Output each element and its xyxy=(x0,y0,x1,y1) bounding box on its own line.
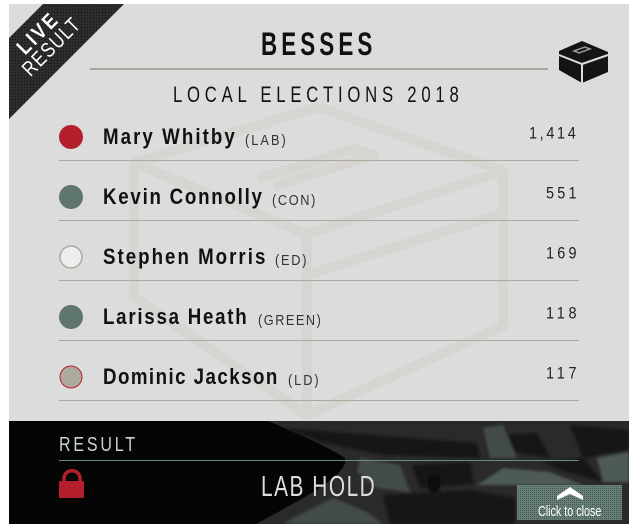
candidate name: Kevin Connolly xyxy=(103,186,263,209)
panel: result footer xyxy=(9,421,629,524)
result label: RESULT xyxy=(59,433,135,455)
result value: LAB HOLD xyxy=(261,471,375,503)
row: Mary Whitby xyxy=(59,124,576,149)
panel: main background xyxy=(9,4,629,421)
candidate name: Dominic Jackson xyxy=(103,366,277,389)
corner banner: live result: LIVE xyxy=(12,9,63,60)
votes: 169 xyxy=(546,244,577,263)
candidate name: Stephen Morris xyxy=(103,246,265,269)
icon: chevron up xyxy=(557,487,583,500)
icon: ballot box xyxy=(559,41,608,83)
result rule xyxy=(59,460,579,461)
party label: (CON) xyxy=(272,191,315,208)
row: Stephen Morris xyxy=(60,244,577,269)
party dot: GREEN xyxy=(59,305,83,329)
party dot: LD xyxy=(60,366,82,388)
votes: 118 xyxy=(546,304,577,323)
row: Kevin Connolly xyxy=(59,184,577,209)
party label: (LAB) xyxy=(245,131,286,148)
votes: 551 xyxy=(546,184,577,203)
title: BESSES xyxy=(261,26,372,62)
party label: (ED) xyxy=(275,251,306,268)
icon: padlock xyxy=(59,471,84,498)
party dot: ED xyxy=(60,246,82,268)
watermark: ballot box xyxy=(134,107,503,415)
corner banner: live result: RESULT xyxy=(18,14,86,81)
party label: (LD) xyxy=(288,371,319,388)
button: click to close: Click to close xyxy=(538,502,601,519)
party dot: LAB xyxy=(59,125,83,149)
votes: 1,414 xyxy=(529,124,576,143)
button: click to close xyxy=(517,485,622,520)
candidate name: Larissa Heath xyxy=(103,306,247,329)
corner banner: live result xyxy=(9,4,124,119)
title rule xyxy=(90,68,548,70)
votes: 117 xyxy=(546,364,577,383)
subtitle: LOCAL ELECTIONS 2018 xyxy=(173,83,459,108)
row: Dominic Jackson xyxy=(60,364,577,389)
candidate name: Mary Whitby xyxy=(103,126,235,149)
party dot: CON xyxy=(59,185,83,209)
party label: (GREEN) xyxy=(258,311,321,328)
row: Larissa Heath xyxy=(59,304,577,329)
